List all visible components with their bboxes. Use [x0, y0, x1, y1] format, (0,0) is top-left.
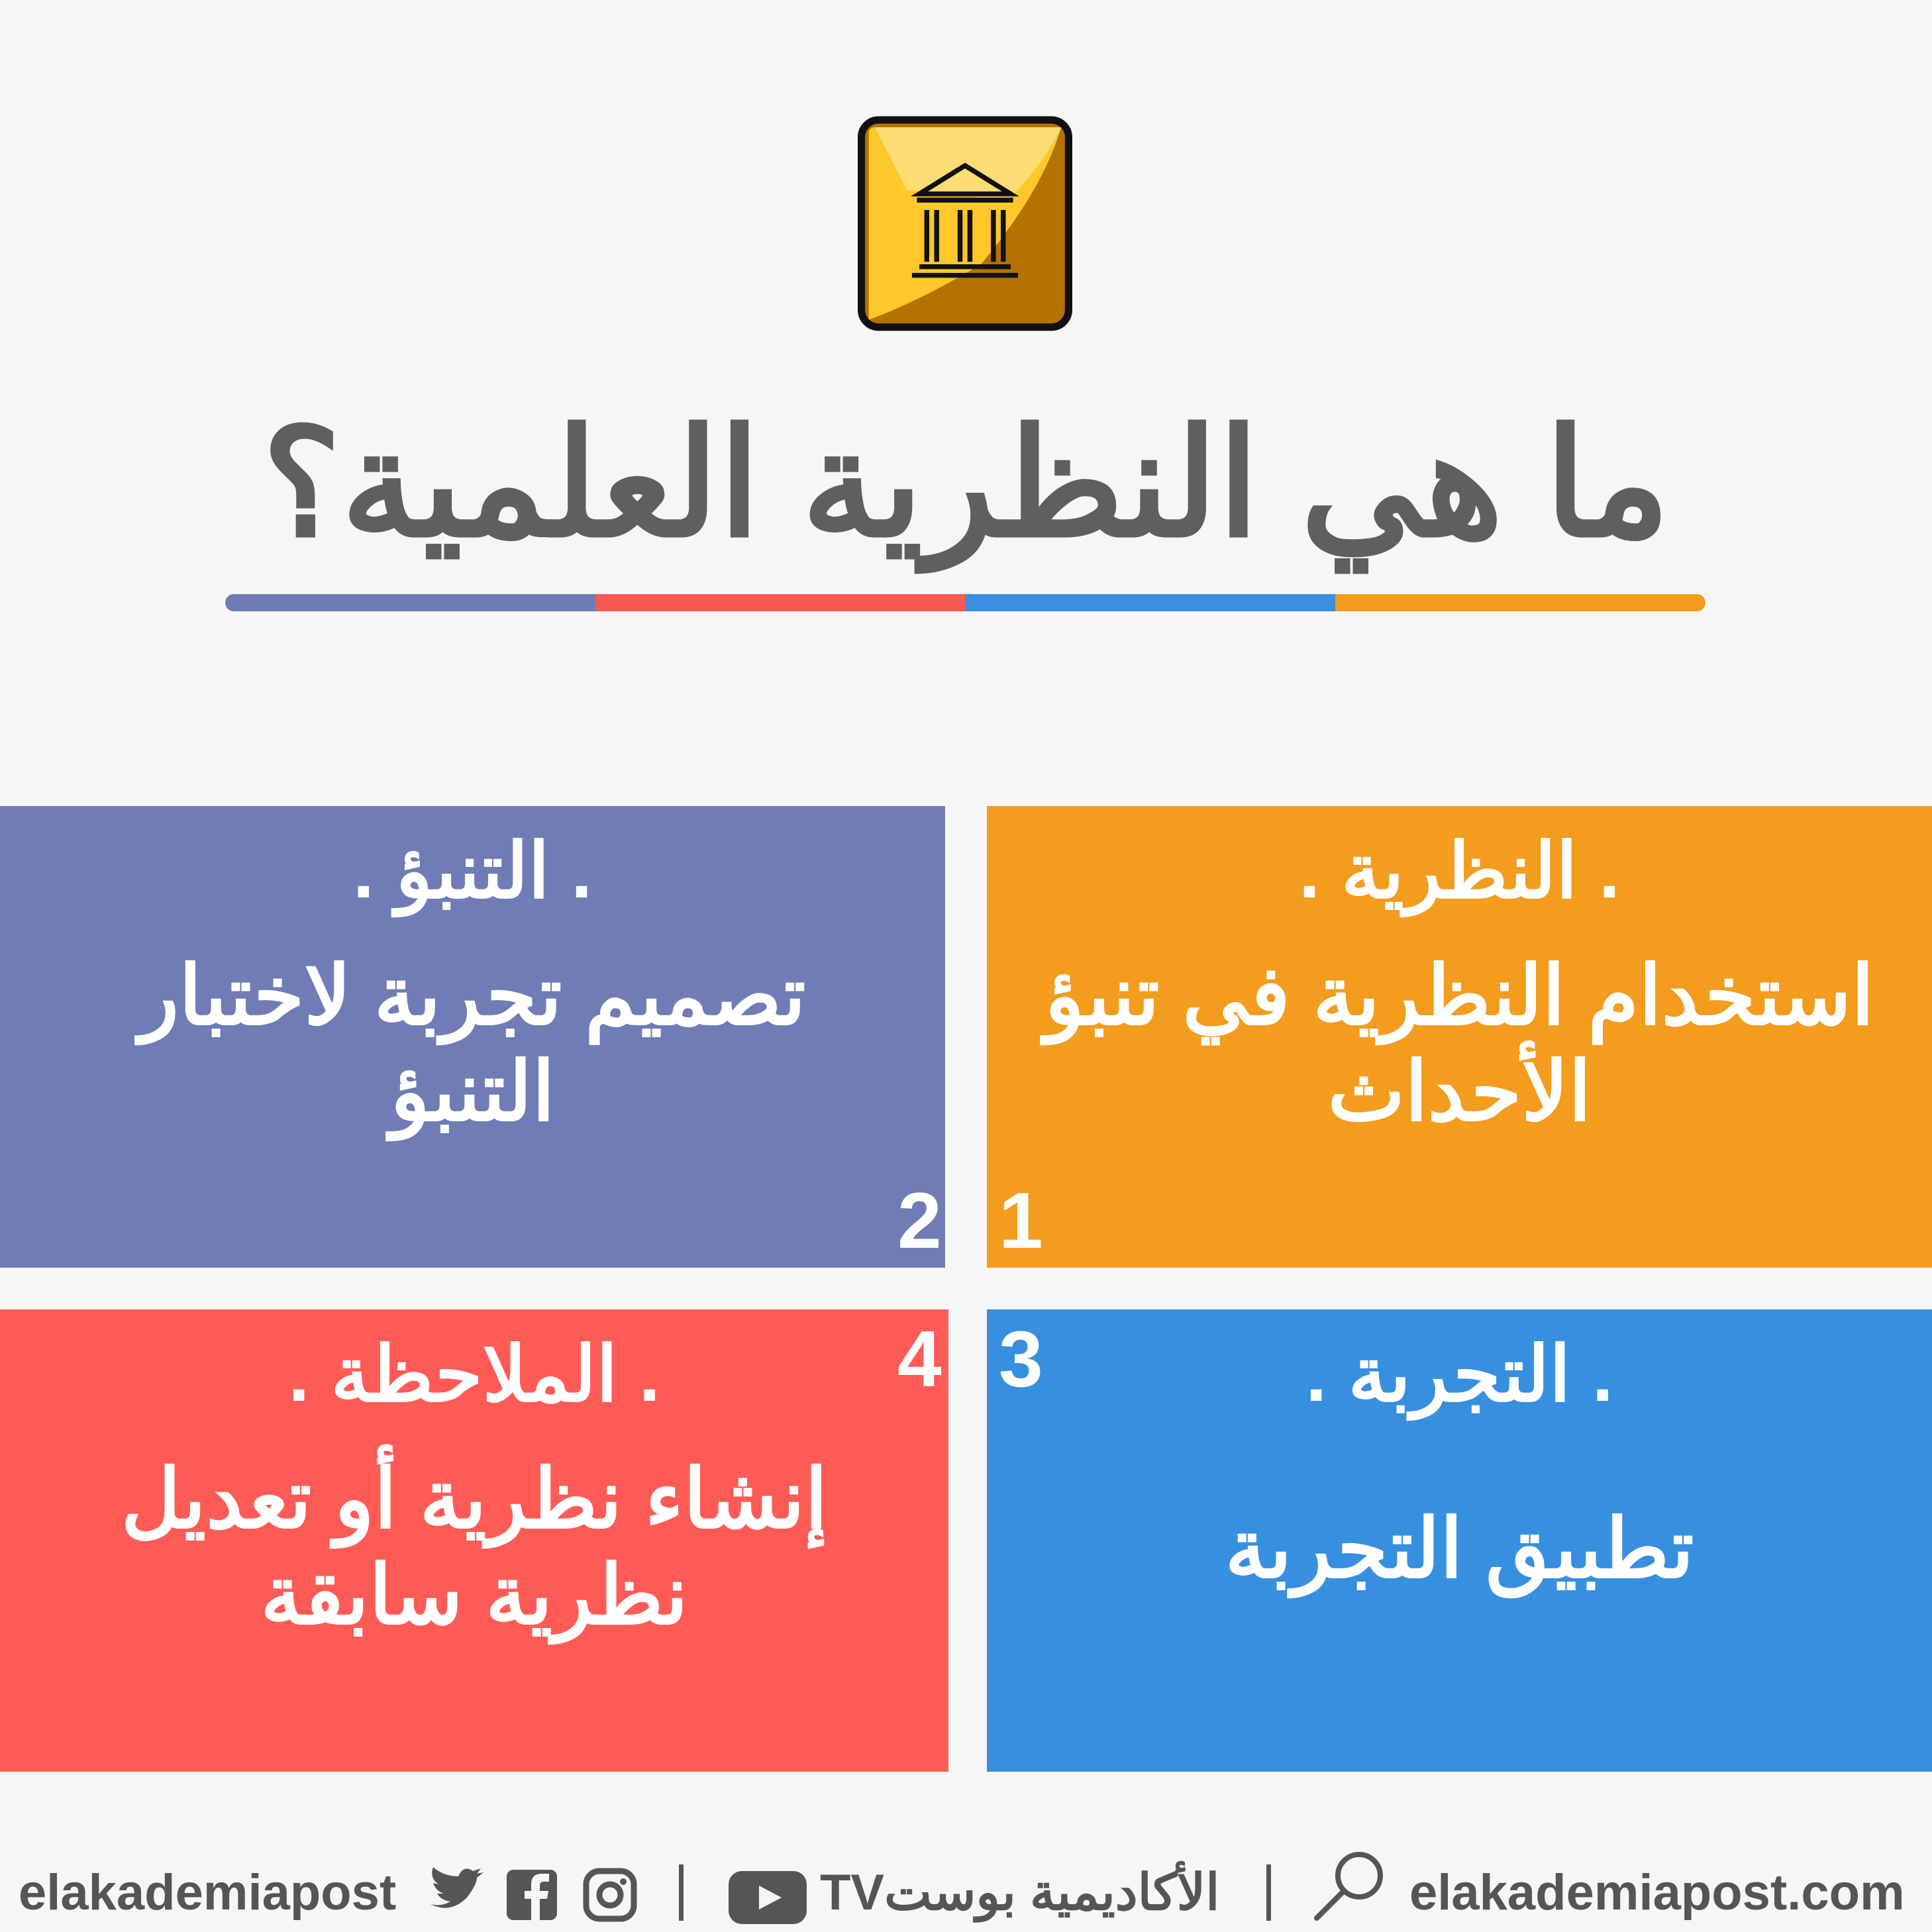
- panel: theory (1): استخدام النظرية في تنبؤ: [1044, 950, 1874, 1042]
- panel: observation (4): نظرية سابقة: [260, 1550, 688, 1641]
- color bar: [225, 594, 1705, 611]
- panel: experiment (3): تطبيق التجربة: [1225, 1503, 1694, 1595]
- panel: prediction (2): تصميم تجربة لاختبار: [139, 950, 806, 1042]
- footer: search icon: [1314, 1852, 1383, 1921]
- panel: experiment (3): 3: [999, 1315, 1043, 1403]
- footer: handle: elakademiapost: [19, 1864, 396, 1921]
- footer: channel name: TVالأكاديمية بوست: [820, 1864, 1219, 1921]
- panel: prediction (2): 2: [897, 1176, 942, 1265]
- panel: prediction (2): . التنبؤ .: [353, 828, 592, 914]
- panel: theory (1): الأحداث: [1327, 1046, 1592, 1138]
- panel: theory (1): 1: [999, 1176, 1043, 1265]
- footer: social icons: [431, 1867, 637, 1922]
- panel: theory (1): [987, 806, 1932, 1268]
- panel: experiment (3): . التجربة .: [1305, 1331, 1613, 1417]
- panel: prediction (2): [0, 806, 945, 1268]
- title: ما هي النظرية العلمية؟: [262, 400, 1670, 567]
- footer: website: elakademiapost.com: [1409, 1864, 1905, 1921]
- divider: [1266, 1864, 1271, 1921]
- icon: museum: [858, 117, 1072, 331]
- panel: experiment (3): [987, 1309, 1932, 1772]
- panel: observation (4): . الملاحظة .: [288, 1331, 660, 1417]
- footer: youtube icon: [729, 1871, 807, 1924]
- divider: [679, 1864, 684, 1921]
- panel: observation (4): إنشاء نظرية أو تعديل: [121, 1454, 827, 1545]
- panel: theory (1): . النظرية .: [1299, 828, 1620, 914]
- panel: observation (4): 4: [897, 1315, 942, 1403]
- panel: prediction (2): التنبؤ: [390, 1046, 555, 1138]
- panel: observation (4): [0, 1309, 948, 1772]
